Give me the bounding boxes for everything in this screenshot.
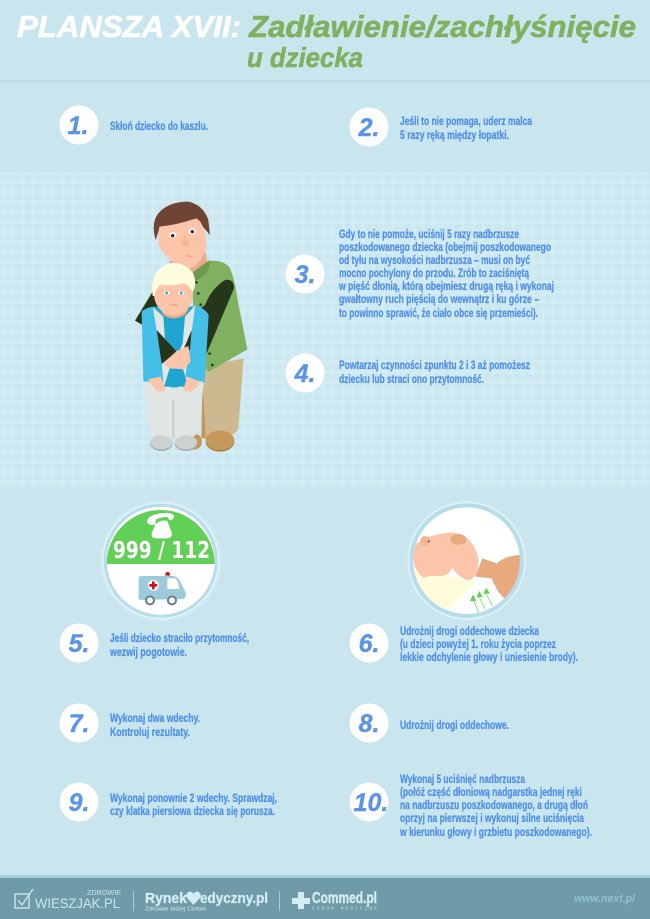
step 1 bbox=[60, 106, 208, 144]
step 4 bbox=[286, 354, 530, 392]
website address: www.next.pl bbox=[574, 893, 636, 905]
child shirt bbox=[153, 307, 200, 387]
step 2: 2. bbox=[358, 114, 379, 142]
adult eyes bbox=[169, 228, 196, 238]
step 3: od tyłu na wysokości nadbrzusza – musi on być bbox=[339, 253, 530, 267]
step 8: Udrożnij drogi oddechowe. bbox=[400, 718, 509, 732]
step 6: (u dzieci powyżej 1. roku życia poprzez bbox=[400, 637, 556, 651]
logo: Commed bbox=[292, 890, 377, 912]
child body bbox=[412, 568, 477, 610]
step 3: w pięść dłonią, którą obejmiesz drugą ręką i wykonaj bbox=[338, 279, 554, 293]
step 1: Skłoń dziecko do kaszlu. bbox=[110, 119, 208, 133]
step 10: 10. bbox=[354, 789, 388, 817]
step 1: 1. bbox=[68, 112, 88, 140]
emergency number badge: 999 / 112 bbox=[113, 538, 210, 564]
adult collar bbox=[191, 261, 210, 280]
step 8: 8. bbox=[359, 710, 379, 738]
logo: Rynek Medyczny bbox=[145, 890, 268, 912]
step 7: Kontroluj rezultaty. bbox=[110, 725, 190, 739]
child blue sleeves bbox=[142, 307, 163, 382]
step 2: Jeśli to nie pomaga, uderz malca bbox=[400, 114, 532, 128]
step 9: czy klatka piersiowa dziecka się porusza. bbox=[110, 804, 275, 818]
title: PLANSZA XVII: bbox=[17, 9, 241, 44]
step 3: gwałtowny ruch pięścią do wewnątrz i ku górze – bbox=[339, 292, 539, 306]
step 2: 5 razy ręką między łopatki. bbox=[400, 128, 509, 142]
child eyes bbox=[164, 291, 184, 295]
step 5: wezwij pogotowie. bbox=[109, 645, 187, 659]
emergency number badge bbox=[102, 502, 220, 620]
logo: Wieszjak: WIESZJAK.PL bbox=[35, 895, 120, 911]
child neck bbox=[160, 307, 190, 318]
child vest bbox=[153, 307, 173, 387]
adult dark sleeves bbox=[135, 280, 234, 363]
logo: Commed: FORUM MEDYCZNE bbox=[312, 906, 377, 912]
adult far shoe bbox=[186, 434, 202, 450]
step 4: dziecku lub straci ono przytomność. bbox=[339, 372, 484, 386]
step 5: Jeśli dziecko straciło przytomność, bbox=[110, 631, 249, 645]
logo: Rynek Medyczny: edyczny.pl bbox=[200, 890, 268, 907]
step 5 bbox=[60, 624, 249, 662]
logo: Rynek Medyczny: Rynek bbox=[145, 890, 188, 907]
step 3: mocno pochylony do przodu. Zrób to zaciśniętą bbox=[339, 266, 529, 280]
logo: Commed: Commed.pl bbox=[312, 890, 377, 907]
step 3: poszkodowanego dziecka (obejmij poszkodowanego bbox=[339, 240, 551, 254]
child hands bbox=[148, 377, 200, 392]
step 10 bbox=[350, 772, 592, 839]
title: u dziecka bbox=[247, 42, 363, 73]
step 3: to powinno sprawić, że ciało obce się przemieści). bbox=[339, 306, 538, 320]
adult shirt buttons bbox=[195, 281, 214, 366]
illustration: adult helping child bbox=[135, 202, 247, 452]
step 4: 4. bbox=[294, 360, 315, 388]
adult neck bbox=[168, 252, 208, 277]
step 10: Wykonaj 5 uciśnięć nadbrzusza bbox=[400, 772, 525, 786]
step 8 bbox=[350, 704, 509, 742]
icon: telephone bbox=[147, 513, 174, 538]
step 7 bbox=[60, 704, 200, 742]
child hair bbox=[152, 263, 195, 296]
logo: Rynek Medyczny: Zdrowie bliżej Ciebie bbox=[145, 906, 206, 912]
step 9: 9. bbox=[69, 789, 89, 817]
icon: ambulance bbox=[138, 572, 186, 605]
footer bbox=[0, 875, 650, 919]
adult hair bbox=[154, 202, 210, 240]
step 10: (połóż część dłoniową nadgarstka jednej ręki bbox=[400, 785, 582, 799]
clasped hands bbox=[163, 346, 191, 369]
child trousers bbox=[144, 380, 204, 438]
adult forearms over child bbox=[157, 330, 177, 364]
step 6: Udrożnij drogi oddechowe dziecka bbox=[400, 624, 539, 638]
step 6: lekkie odchylenie głowy i uniesienie brody). bbox=[400, 650, 578, 664]
step 3: 3. bbox=[295, 261, 315, 289]
step 4: Powtarzaj czynności zpunktu 2 i 3 aż pomożesz bbox=[339, 358, 530, 372]
step 6 bbox=[350, 624, 578, 664]
logo: Wieszjak: ZDROWIE bbox=[87, 890, 121, 897]
step 7: 7. bbox=[69, 710, 89, 738]
step 6: 6. bbox=[359, 630, 379, 658]
adult trousers bbox=[201, 358, 244, 438]
step 2 bbox=[350, 108, 532, 146]
child shoes bbox=[150, 435, 197, 451]
airflow arrows bbox=[473, 593, 492, 613]
step 5: 5. bbox=[69, 630, 89, 658]
child face bbox=[154, 280, 193, 316]
step 3: Gdy to nie pomoże, uciśnij 5 razy nadbrzusze bbox=[339, 227, 519, 241]
child head bbox=[413, 532, 478, 580]
airway illustration badge bbox=[408, 502, 526, 620]
step 9 bbox=[60, 782, 277, 822]
adult face bbox=[158, 218, 207, 270]
title: Zadławienie/zachłyśnięcie bbox=[248, 9, 636, 44]
logo: Wieszjak bbox=[15, 889, 121, 911]
step 3 bbox=[286, 227, 554, 320]
patterned band bbox=[0, 172, 650, 488]
title bbox=[17, 9, 636, 73]
helper arm bbox=[475, 555, 522, 600]
step 7: Wykonaj dwa wdechy. bbox=[110, 711, 200, 725]
step 9: Wykonaj ponownie 2 wdechy. Sprawdzaj, bbox=[110, 791, 277, 805]
adult shoe bbox=[206, 431, 234, 452]
adult shirt bbox=[192, 261, 247, 372]
